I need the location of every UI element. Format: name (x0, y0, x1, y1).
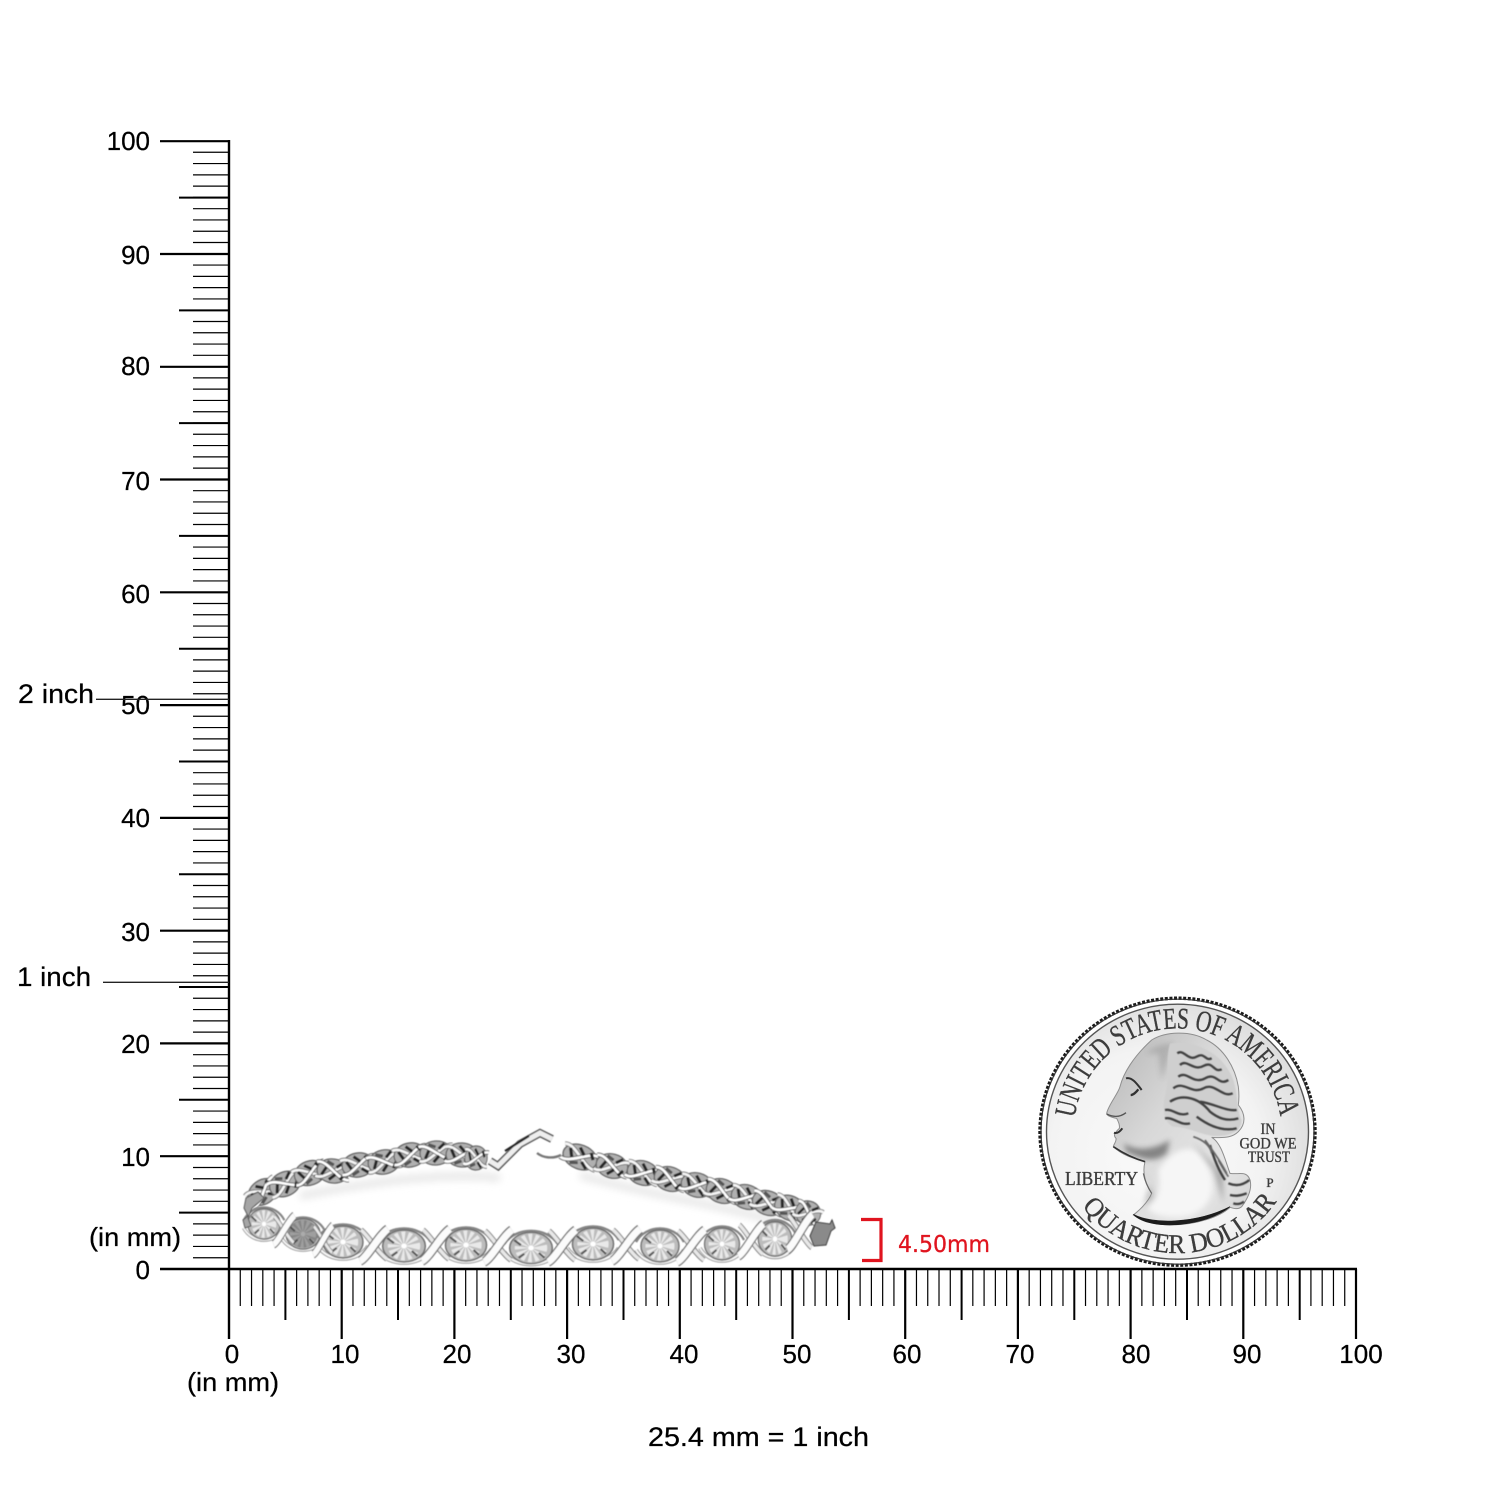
face features (1107, 1078, 1152, 1193)
portrait (1107, 1033, 1251, 1225)
horizontal scale numbers: 20 (443, 1339, 471, 1369)
coin: quarter dollar: UNITED STATES OF AMERICA (1055, 1008, 1298, 1117)
bust highlight (1148, 1149, 1212, 1217)
hair mass (1164, 1043, 1242, 1136)
In God We Trust: TRUST (1248, 1149, 1290, 1166)
lower strand (243, 1192, 835, 1264)
vertical scale numbers: 10 (121, 1142, 150, 1172)
conversion note: 25.4 mm = 1 inch (648, 1422, 869, 1452)
horizontal scale numbers: 10 (331, 1339, 359, 1369)
horizontal scale numbers: 60 (893, 1339, 921, 1369)
horizontal scale numbers: 100 (1339, 1339, 1383, 1369)
dark medallion tint (288, 1220, 318, 1248)
vertical scale numbers: 90 (121, 240, 150, 270)
vertical scale numbers: 80 (121, 351, 150, 381)
horizontal scale numbers: 50 (783, 1339, 811, 1369)
marker: 2 inch: 2 inch (18, 679, 94, 709)
vertical scale numbers: 50 (121, 690, 150, 720)
bust shadow line (1133, 1207, 1230, 1225)
facial shading (1123, 1043, 1223, 1207)
size label: 4.50mm (898, 1232, 990, 1258)
lower strand medallions (244, 1207, 284, 1240)
vertical scale numbers (107, 126, 150, 1285)
horizontal scale numbers: 90 (1233, 1339, 1261, 1369)
vertical scale numbers: 40 (121, 803, 150, 833)
horizontal scale numbers (225, 1339, 1383, 1369)
vertical scale numbers: 20 (121, 1029, 150, 1059)
horizontal scale numbers: 0 (225, 1339, 239, 1369)
In God We Trust (1240, 1121, 1296, 1166)
marker: 1 inch: 1 inch (17, 962, 91, 992)
vertical scale numbers: 30 (121, 917, 150, 947)
Liberty: LIBERTY (1065, 1168, 1138, 1190)
In God We Trust: GOD WE (1240, 1136, 1296, 1152)
size bracket (861, 1220, 881, 1260)
lower strand crossings (274, 1216, 294, 1244)
horizontal scale numbers: 70 (1006, 1339, 1034, 1369)
vertical scale numbers: 0 (136, 1255, 150, 1285)
horizontal ruler (160, 1269, 1357, 1339)
vertical scale numbers: 70 (121, 466, 150, 496)
vertical ruler (160, 140, 229, 1339)
vertical axis unit label: (in mm) (89, 1222, 181, 1252)
head and bust (1107, 1033, 1251, 1225)
horizontal scale numbers: 80 (1122, 1339, 1150, 1369)
denomination: Quarter Dollar (1082, 1201, 1277, 1253)
coin edge (1040, 998, 1315, 1265)
horizontal scale numbers: 40 (670, 1339, 698, 1369)
vertical scale numbers: 100 (107, 126, 150, 156)
reflection shadow (300, 1175, 780, 1222)
upper strand (242, 1139, 825, 1230)
motto: United States of America (1074, 1028, 1280, 1118)
mint mark: P (1266, 1175, 1274, 1190)
coin field (1046, 1004, 1308, 1259)
coin: quarter dollar: QUARTER DOLLAR (1085, 1194, 1277, 1254)
coin: quarter dollar (1038, 996, 1317, 1267)
bracelet end catch (810, 1220, 835, 1246)
horizontal axis unit label: (in mm) (187, 1367, 279, 1397)
horizontal scale numbers: 30 (557, 1339, 585, 1369)
bracelet photo (242, 1133, 835, 1264)
vertical scale numbers: 60 (121, 579, 150, 609)
hair curls (1165, 1052, 1249, 1204)
In God We Trust: IN (1260, 1121, 1276, 1138)
clasp (490, 1133, 561, 1166)
